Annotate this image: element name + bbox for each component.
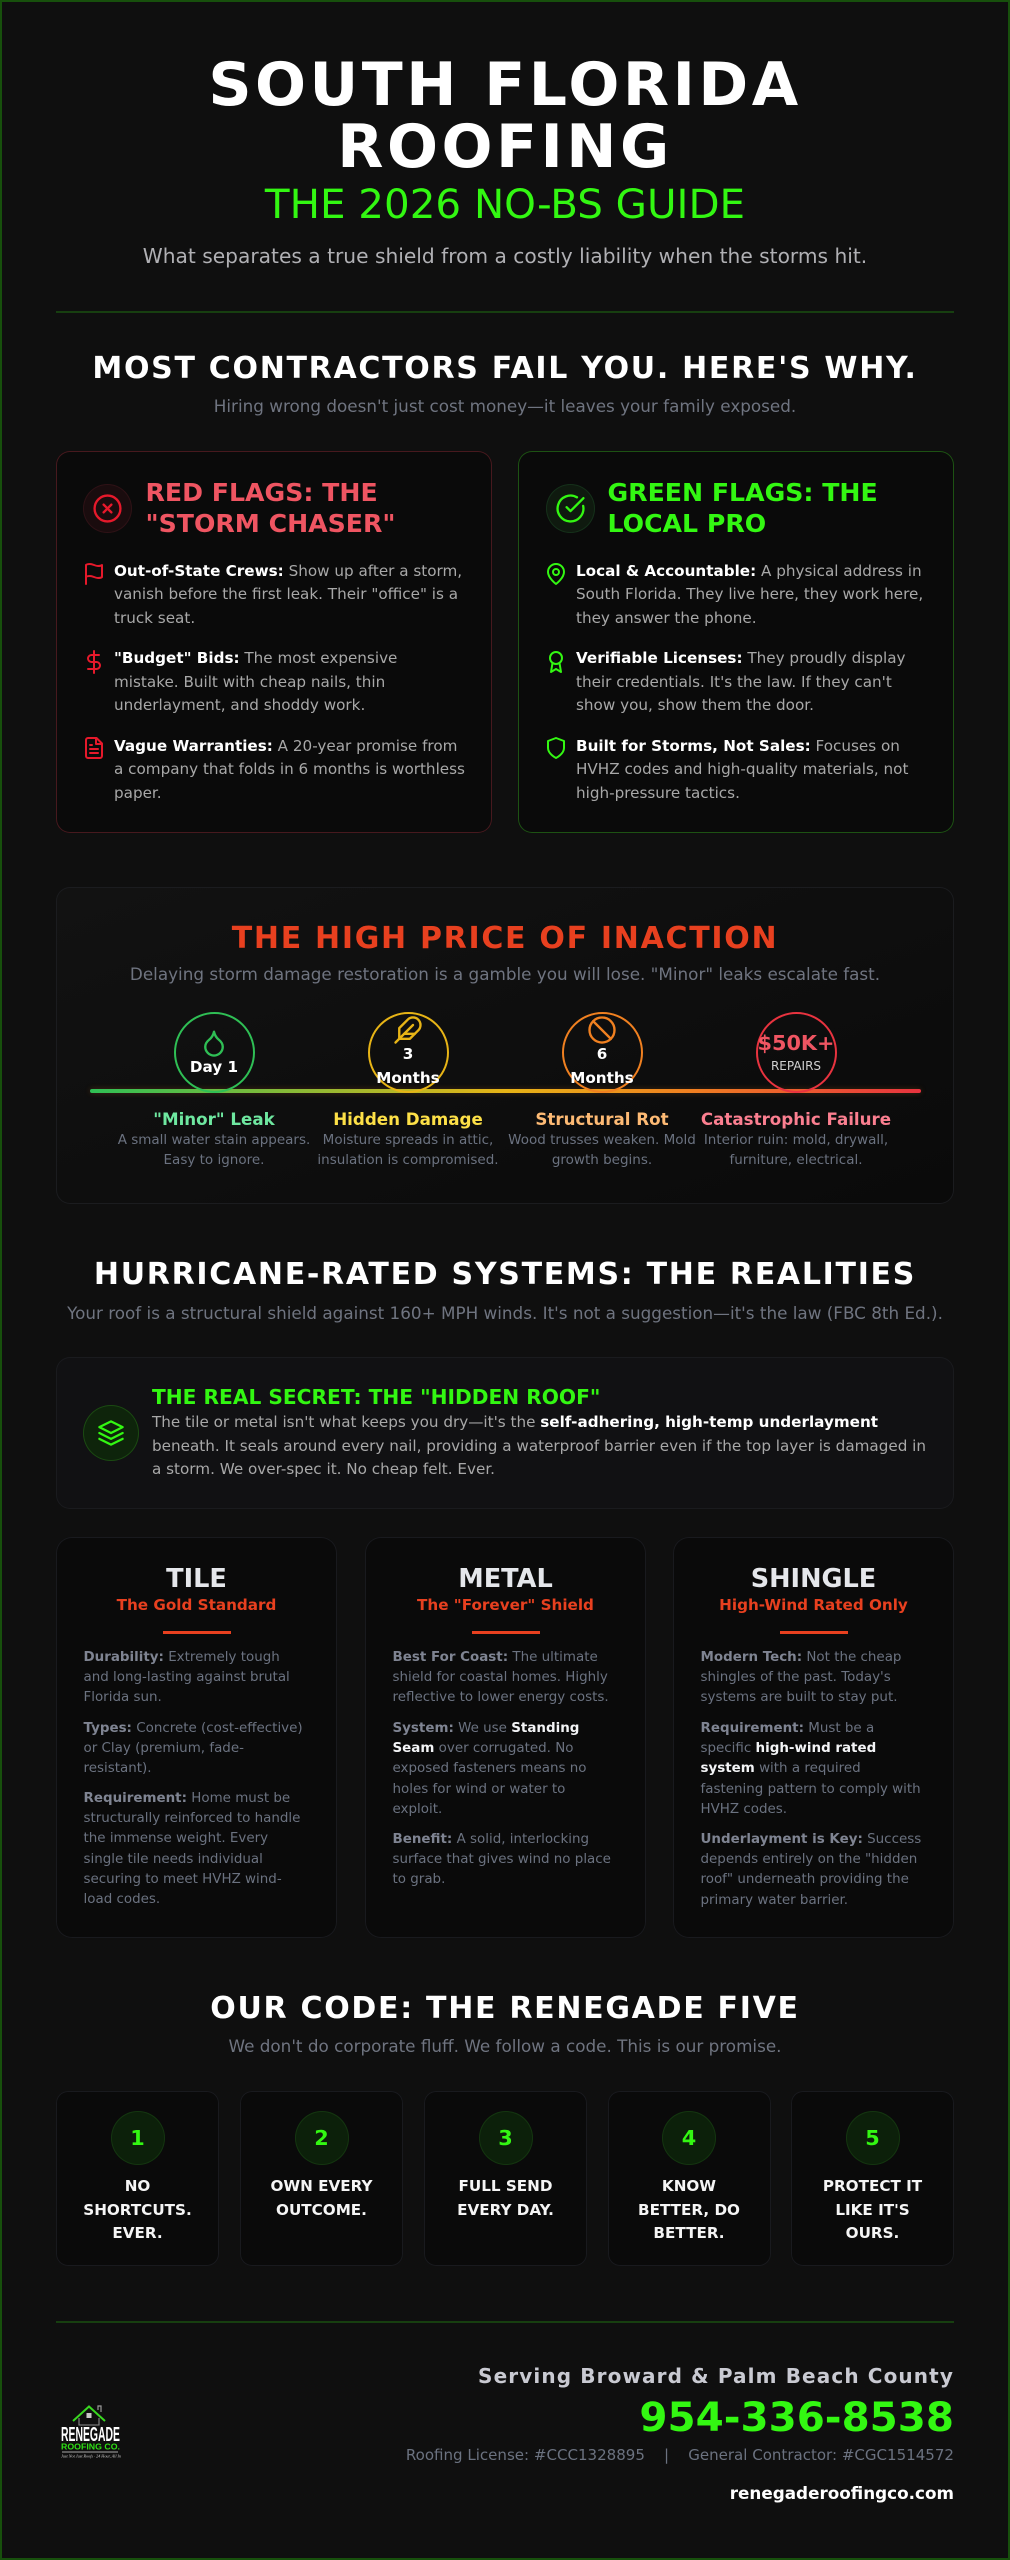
card subtitle: High-Wind Rated Only — [719, 1596, 908, 1614]
card subtitle: The Gold Standard — [117, 1596, 276, 1614]
subheading: hiring wrong: Hiring wrong doesn't just cost money—it leaves your family exposed. — [214, 396, 796, 416]
text: system — [392, 1721, 587, 1817]
code card 5 — [791, 2091, 954, 2266]
text: best for coast — [392, 1650, 609, 1705]
circle: day 1 — [174, 1012, 254, 1093]
step description: Wood trusses weaken. Mold — [508, 1132, 696, 1148]
step title: Structural Rot — [535, 1109, 669, 1129]
text: requirement: HVHZ codes. — [700, 1802, 787, 1817]
text: durability — [84, 1650, 290, 1705]
text: requirement: structurally reinforced to handle — [84, 1811, 300, 1826]
promise text — [270, 2177, 373, 2219]
step title: Hidden Damage — [333, 1109, 483, 1129]
label: 6 months — [570, 1045, 634, 1087]
promise text: OURS. — [846, 2224, 899, 2242]
item: verifiable licenses — [576, 649, 906, 714]
icon: flag — [85, 563, 103, 585]
footer: licenses: Roofing License: #CCC1328895 | General Contractor: #CGC1514572 — [406, 2446, 954, 2464]
panel: red flags — [56, 451, 492, 833]
step description: Interior ruin: mold, drywall, — [704, 1132, 888, 1148]
icon: x in circle — [83, 484, 132, 533]
item: local and accountable: Local & Accountable: A physical address in — [576, 562, 922, 580]
promise text: EVERY DAY. — [457, 2201, 554, 2219]
card title: SHINGLE — [751, 1564, 876, 1594]
timeline step 3: structural rot — [508, 1012, 696, 1168]
label: 3 months: Months — [376, 1069, 440, 1087]
icon: feather — [394, 1016, 422, 1044]
text: best for coast: Best For Coast: The ultimate — [392, 1650, 598, 1665]
text: requirement — [700, 1721, 921, 1817]
step description: Easy to ignore. — [164, 1152, 264, 1168]
item: out-of-state crews: Out-of-State Crews: Show up after a storm, — [114, 562, 462, 580]
tagline: What separates a true shield from a costly liability when the storms hit. — [143, 244, 867, 268]
text: requirement: the immense weight. Every — [84, 1831, 268, 1846]
panel heading: green flags: LOCAL PRO — [608, 508, 766, 538]
promise text — [791, 2175, 954, 2246]
promise text — [83, 2177, 192, 2242]
text: durability: and long-lasting against brutal — [84, 1670, 290, 1685]
text: requirement: system with a required — [700, 1761, 861, 1776]
label: 6 months: Months — [570, 1069, 634, 1087]
circle: 3 months — [368, 1012, 448, 1093]
label: repairs: REPAIRS — [771, 1059, 821, 1073]
timeline step 2: hidden damage — [317, 1012, 499, 1168]
card title: METAL — [458, 1564, 553, 1594]
step description: A small water stain appears. — [118, 1132, 310, 1148]
item: verifiable licenses: show you, show them the door. — [576, 696, 814, 714]
number badge — [846, 2111, 900, 2165]
number badge: 1 — [130, 2126, 145, 2150]
callout body: a storm. We over-spec it. No cheap felt. Ever. — [152, 1460, 495, 1478]
text: modern tech: Modern Tech: Not the cheap — [700, 1650, 901, 1665]
step description: Moisture spreads in attic, — [323, 1132, 493, 1148]
item: vague warranties: a company that folds in 6 months is worthless — [114, 760, 465, 778]
text: system: holes for wind or water to — [392, 1782, 565, 1797]
icon: check in circle — [546, 484, 595, 533]
code card 4 — [608, 2091, 770, 2266]
panel heading: green flags: GREEN FLAGS: THE — [608, 478, 878, 507]
text: system: Seam over corrugated. No — [392, 1741, 573, 1756]
card title: TILE — [166, 1564, 227, 1594]
icon: map pin — [547, 563, 565, 585]
text: system: System: We use Standing — [392, 1721, 579, 1736]
callout body — [152, 1413, 926, 1478]
text: best for coast: reflective to lower energy costs. — [392, 1690, 609, 1705]
text: requirement: Requirement: Must be a — [700, 1721, 874, 1736]
text: requirement: securing to meet HVHZ wind- — [84, 1872, 282, 1887]
heading: our code: OUR CODE: THE RENEGADE FIVE — [210, 1990, 800, 2026]
code card 2 — [240, 2091, 403, 2266]
item: verifiable licenses: their credentials. It's the law. If they can't — [576, 673, 892, 691]
title: ROOFING — [337, 112, 673, 182]
text: modern tech — [700, 1650, 901, 1705]
item: budget bids: "Budget" Bids: The most expensive — [114, 649, 397, 667]
panel heading: red flags: RED FLAGS: THE — [146, 478, 378, 507]
text: requirement: single tile needs individual — [84, 1852, 263, 1867]
panel heading: high price of inaction: THE HIGH PRICE OF INACTION — [232, 920, 778, 956]
label: 3 months: 3 — [403, 1045, 413, 1063]
text: best for coast: shield for coastal homes. Highly — [392, 1670, 608, 1685]
promise text: OWN EVERY — [270, 2177, 373, 2195]
label: 6 months: 6 — [597, 1045, 607, 1063]
panel heading: red flags — [146, 478, 396, 538]
heading: hurricane-rated systems: HURRICANE-RATED SYSTEMS: THE REALITIES — [94, 1256, 916, 1292]
promise text: BETTER. — [653, 2224, 725, 2242]
circle: 6 months — [562, 1012, 642, 1093]
promise text: EVER. — [112, 2224, 163, 2242]
number badge — [662, 2111, 716, 2165]
panel: green flags — [518, 451, 954, 833]
number badge: 3 — [498, 2126, 513, 2150]
footer: website: renegaderoofingco.com — [730, 2483, 954, 2503]
promise text: BETTER, DO — [638, 2201, 740, 2219]
number badge — [110, 2111, 164, 2165]
step description: insulation is compromised. — [317, 1152, 499, 1168]
promise text: NO — [125, 2177, 150, 2195]
code card 1 — [56, 2091, 219, 2266]
number badge: 2 — [314, 2126, 329, 2150]
number badge — [294, 2111, 348, 2165]
timeline bar — [90, 1089, 921, 1093]
promise text: KNOW — [662, 2177, 716, 2195]
panel subheading: Delaying storm damage restoration is a gamble you will lose. "Minor" leaks escalate fast. — [130, 964, 880, 984]
text: requirement: fastening pattern to comply with — [700, 1782, 921, 1797]
icon: shield — [547, 737, 565, 759]
number badge: 4 — [682, 2126, 696, 2150]
text: underlayment: primary water barrier. — [700, 1893, 848, 1908]
text: types: or Clay (premium, fade- — [84, 1741, 244, 1756]
item: local and accountable: they answer the phone. — [576, 609, 757, 627]
figure: $50K+: $50K+ — [758, 1031, 834, 1055]
code card 3 — [424, 2091, 587, 2266]
card: metal — [365, 1537, 646, 1938]
icon: water drop — [204, 1030, 224, 1057]
text: benefit: Benefit: A solid, interlocking — [392, 1832, 589, 1847]
promise text: PROTECT IT — [823, 2177, 922, 2195]
text: durability: Durability: Extremely tough — [84, 1650, 280, 1665]
step description: furniture, electrical. — [729, 1152, 863, 1168]
step description: growth begins. — [552, 1152, 652, 1168]
item: local and accountable — [576, 562, 923, 627]
text: underlayment: Underlayment is Key: Success — [700, 1832, 921, 1847]
text: underlayment: roof" underneath providing the — [700, 1872, 909, 1887]
item: built for storms: HVHZ codes and high-quality materials, not — [576, 760, 908, 778]
step description — [508, 1132, 696, 1168]
item: budget bids: underlayment, and shoddy work. — [114, 696, 365, 714]
logo: renegade roofing co — [56, 2402, 126, 2464]
step title: Catastrophic Failure — [701, 1109, 891, 1129]
promise text — [424, 2175, 587, 2222]
item: out-of-state crews — [114, 562, 462, 627]
item: out-of-state crews: vanish before the first leak. Their "office" is a — [114, 585, 458, 603]
logo: renegade roofing co: Just Not Just Roofs · 24 Hour, All In — [61, 2454, 121, 2460]
text: modern tech: systems are built to stay put. — [700, 1690, 897, 1705]
item: vague warranties: Vague Warranties: A 20-year promise from — [114, 737, 457, 755]
icon: ban — [588, 1016, 616, 1044]
logo: renegade roofing co: ROOFING CO. — [61, 2442, 120, 2452]
label: 3 months — [376, 1045, 440, 1087]
subheading: our promise: We don't do corporate fluff. We follow a code. This is our promise. — [228, 2036, 782, 2056]
text: types: resistant). — [84, 1761, 152, 1776]
text: durability: Florida sun. — [84, 1690, 162, 1705]
text: underlayment: depends entirely on the "hidden — [700, 1852, 917, 1867]
card: tile — [56, 1537, 337, 1938]
icon: dollar sign — [87, 650, 101, 674]
number badge: 5 — [865, 2126, 880, 2150]
text: requirement: load codes. — [84, 1892, 160, 1907]
callout body: beneath. It seals around every nail, providing a waterproof barrier even if the top layer is damaged in — [152, 1437, 926, 1455]
heading: most contractors fail you: MOST CONTRACTORS FAIL YOU. HERE'S WHY. — [92, 351, 918, 386]
text: system: exploit. — [392, 1802, 442, 1817]
item: vague warranties: paper. — [114, 784, 162, 802]
callout heading: THE REAL SECRET: THE "HIDDEN ROOF" — [152, 1385, 600, 1409]
circle: $50K+ repairs — [756, 1012, 836, 1093]
title: SOUTH FLORIDA — [208, 50, 802, 120]
promise text: FULL SEND — [458, 2177, 552, 2195]
text: benefit: surface that gives wind no place — [392, 1852, 611, 1867]
text: requirement: specific high-wind rated — [700, 1741, 876, 1756]
text: types — [84, 1721, 303, 1776]
promise text: LIKE IT'S — [835, 2201, 910, 2219]
subheading: structural shield: Your roof is a structural shield against 160+ MPH winds. It's not a suggestion—it's the law (FBC 8th Ed.). — [67, 1302, 943, 1322]
callout body: The tile or metal isn't what keeps you dry—it's the self-adhering, high-temp underlayment — [152, 1413, 878, 1431]
text: types: Types: Concrete (cost-effective) — [84, 1721, 303, 1736]
text: requirement — [84, 1791, 300, 1907]
step description — [118, 1132, 310, 1168]
timeline step 1: minor leak — [118, 1012, 310, 1168]
text: system: exposed fasteners means no — [392, 1761, 587, 1776]
card: shingle — [673, 1537, 954, 1938]
icon: document — [85, 737, 103, 759]
item: verifiable licenses: Verifiable Licenses: They proudly display — [576, 649, 906, 667]
step title: "Minor" Leak — [153, 1109, 275, 1129]
label: day 1: Day 1 — [190, 1058, 238, 1076]
panel heading: red flags: "STORM CHASER" — [146, 508, 396, 538]
item: out-of-state crews: truck seat. — [114, 609, 195, 627]
icon: layers — [83, 1405, 139, 1461]
step description — [704, 1132, 888, 1168]
text: benefit: to grab. — [392, 1872, 445, 1887]
text: modern tech: shingles of the past. Today's — [700, 1670, 891, 1685]
panel: high price of inaction timeline — [56, 887, 954, 1204]
icon: award — [549, 651, 563, 673]
item: built for storms: Built for Storms, Not Sales: Focuses on — [576, 737, 900, 755]
promise text: SHORTCUTS. — [83, 2201, 192, 2219]
panel: hidden roof callout — [56, 1357, 954, 1509]
text: underlayment — [700, 1832, 921, 1908]
item: budget bids: mistake. Built with cheap nails, thin — [114, 673, 385, 691]
logo: renegade roofing co: RENEGADE — [61, 2424, 120, 2446]
promise text — [608, 2175, 770, 2246]
promise text: OUTCOME. — [276, 2201, 367, 2219]
text: benefit — [392, 1832, 611, 1887]
timeline step 4: catastrophic failure — [701, 1012, 891, 1168]
item: budget bids — [114, 649, 397, 714]
footer: phone number: 954-336-8538 — [639, 2393, 954, 2441]
step description — [317, 1132, 499, 1168]
item: built for storms: high-pressure tactics. — [576, 784, 740, 802]
panel heading: green flags — [608, 478, 878, 538]
number badge — [478, 2111, 532, 2165]
item: vague warranties — [114, 737, 465, 802]
subtitle: THE 2026 NO-BS GUIDE — [265, 180, 745, 228]
title — [208, 50, 802, 182]
footer: service area: Serving Broward & Palm Beach County — [478, 2364, 954, 2388]
item: built for storms — [576, 737, 908, 802]
card subtitle: The "Forever" Shield — [417, 1596, 594, 1614]
item: local and accountable: South Florida. They live here, they work here, — [576, 585, 923, 603]
text: requirement: Requirement: Home must be — [84, 1791, 290, 1806]
